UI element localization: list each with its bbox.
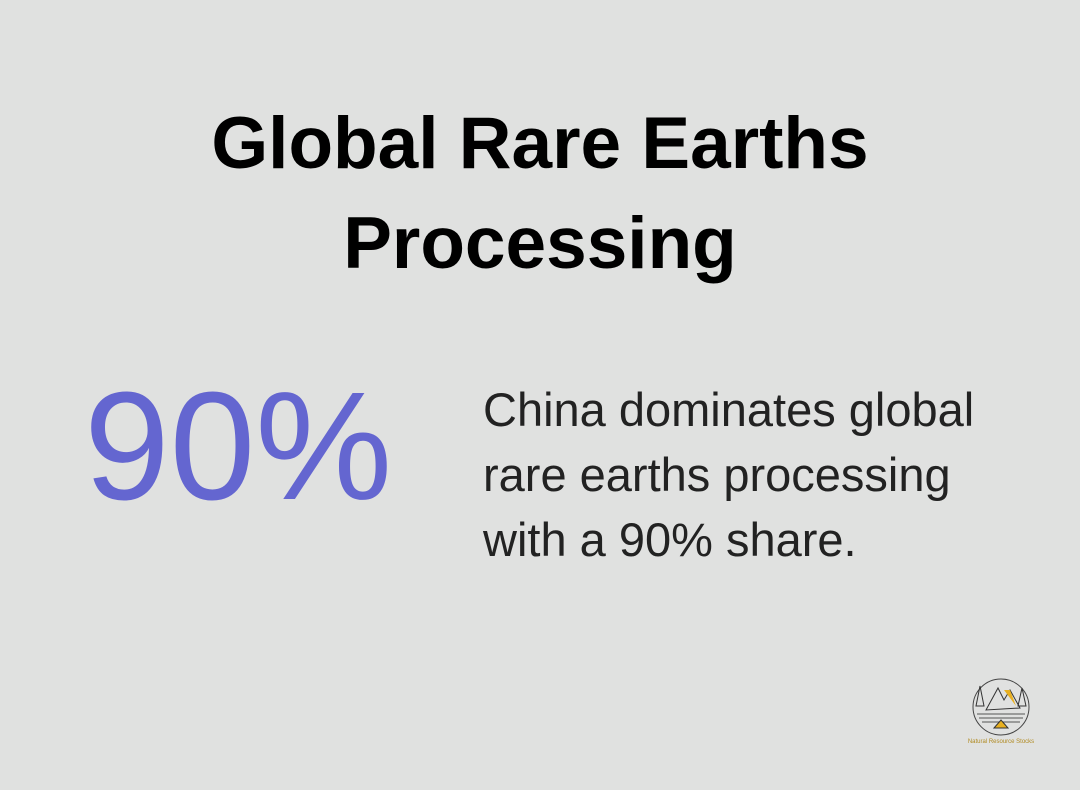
title: Processing <box>343 203 737 284</box>
logo: Natural Resource Stocks <box>968 739 1034 745</box>
logo <box>968 678 1034 745</box>
title <box>211 103 869 284</box>
big stat: 90% <box>84 360 392 532</box>
description text: with a 90% share. <box>483 513 857 566</box>
description text <box>483 383 974 566</box>
description text: China dominates global <box>483 383 974 436</box>
title: Global Rare Earths <box>211 103 869 184</box>
description text: rare earths processing <box>483 448 951 501</box>
